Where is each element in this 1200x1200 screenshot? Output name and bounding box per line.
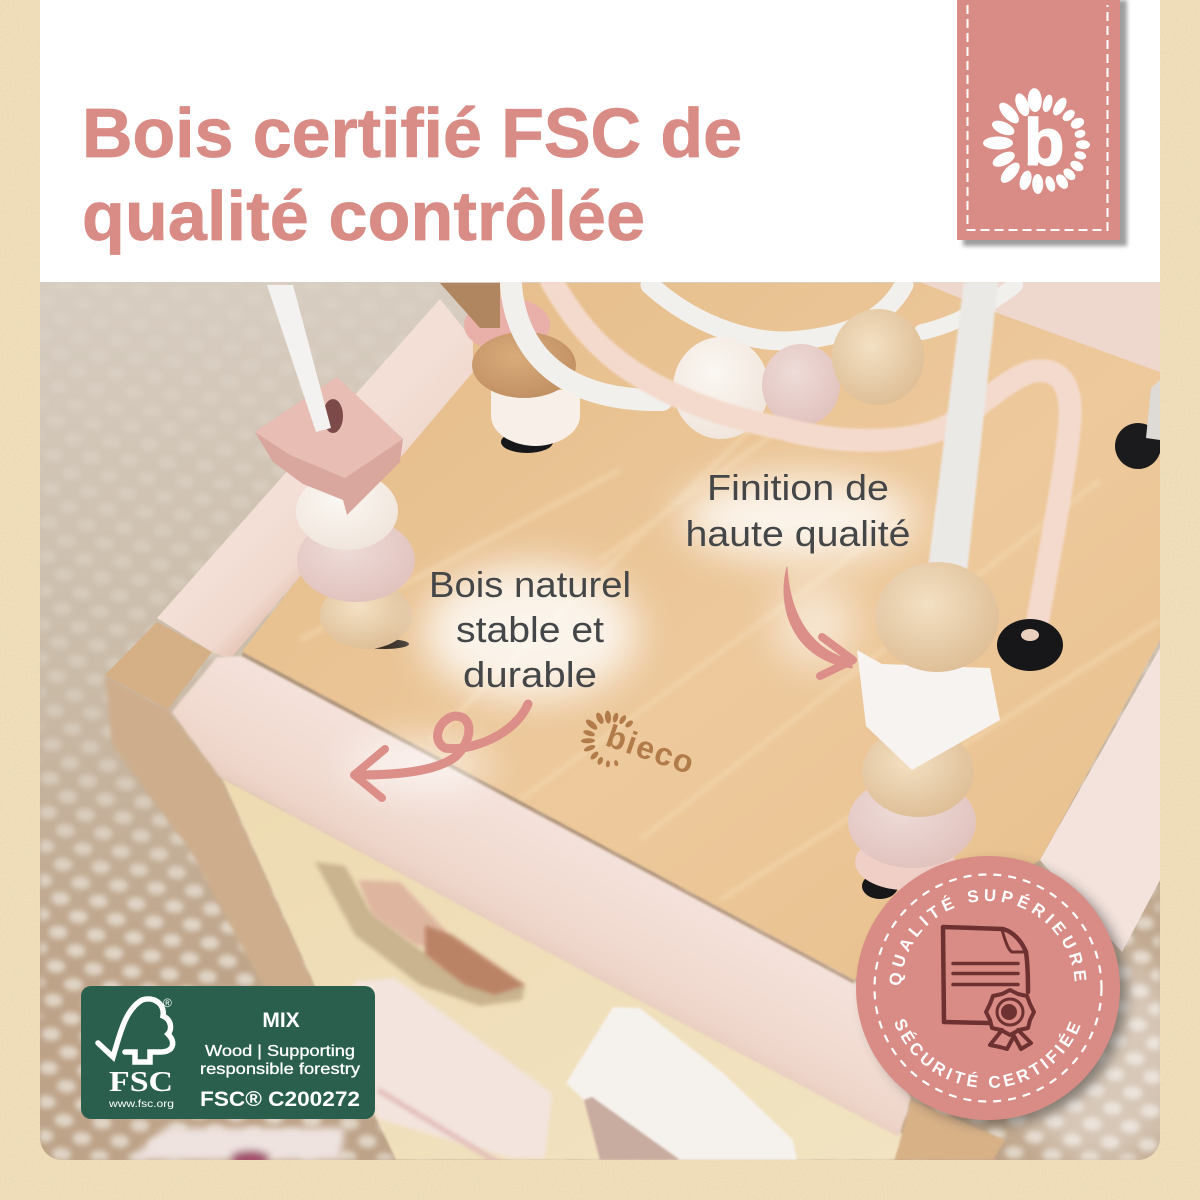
bieco flower logo (983, 88, 1090, 194)
label: high quality finish: Finition de (707, 467, 889, 508)
wooden left leg (104, 676, 316, 986)
front panel with shape cutout (222, 778, 905, 1170)
seal shadow (865, 863, 1127, 1125)
FSC tree and tick logo (98, 999, 173, 1062)
quality seal (856, 855, 1135, 1132)
left white post (267, 285, 331, 432)
left bead stack (255, 285, 415, 649)
registered mark: ® (163, 996, 172, 1010)
FSC claim text (200, 1009, 360, 1111)
FSC claim text: MIX (262, 1009, 300, 1032)
icon: certificate (943, 927, 1034, 1049)
FSC label (81, 986, 375, 1119)
bieco flower logo: b (1024, 105, 1064, 179)
corner block (895, 1100, 1005, 1160)
label: high quality finish (686, 467, 910, 554)
wood grain (300, 400, 1160, 900)
front pink rail (172, 656, 911, 1137)
cutout rim (315, 862, 525, 1006)
FSC background (81, 986, 375, 1119)
seal top text: QUALITÉ SUPÉRIEURE (890, 889, 1086, 985)
white block (566, 1007, 797, 1160)
FSC wordmark: FSC (109, 1066, 173, 1098)
tag body (957, 0, 1120, 240)
right bead stack (848, 562, 1000, 899)
title: Bois certifié FSC de (82, 94, 742, 172)
board shadow line (242, 654, 854, 982)
pink blurred toy block (354, 978, 552, 1158)
pink block (255, 377, 403, 515)
tag shadow (963, 0, 1127, 246)
label: natural wood: durable (463, 654, 597, 695)
blurred flower toy bottom (130, 1128, 345, 1166)
icon: rosette (986, 990, 1034, 1049)
tag stitching (968, 5, 1108, 230)
text highlight glows (345, 476, 916, 791)
left corner post top (105, 622, 212, 709)
seal dashed ring (874, 874, 1102, 1102)
floor rug (40, 282, 1190, 1170)
label: high quality finish: haute qualité (686, 513, 910, 554)
white post (928, 282, 998, 570)
cutout inner light (358, 880, 452, 950)
FSC url: www.fsc.org (108, 1098, 174, 1110)
seal bottom text: SÉCURITÉ CERTIFIÉE (895, 1019, 1081, 1088)
back rails (157, 282, 1160, 952)
pink wire (552, 282, 1070, 630)
title: qualité contrôlée (82, 177, 645, 255)
arrow: curve to bead (784, 567, 853, 676)
black peg for pink wire (997, 619, 1063, 671)
title (82, 94, 742, 255)
seal disc (856, 856, 1120, 1120)
white header band (40, 0, 1160, 282)
FSC claim text: responsible forestry (200, 1061, 360, 1078)
product photo (40, 282, 1190, 1170)
label: natural wood (429, 564, 631, 695)
bieco engraved logo: bieco (602, 718, 699, 781)
wooden top board (242, 283, 1160, 980)
label: natural wood: stable et (456, 609, 604, 650)
cutout inner dark (425, 925, 525, 995)
bookmark tag (957, 0, 1127, 246)
FSC claim text: FSC® C200272 (200, 1088, 360, 1111)
white block slot (584, 1097, 680, 1160)
back bead stack (440, 283, 580, 453)
white wire loops (511, 285, 1015, 400)
label: natural wood: Bois naturel (429, 564, 631, 605)
arrow: loop to rail (354, 704, 528, 798)
pink streak (376, 1088, 498, 1160)
wire beads (673, 309, 924, 439)
FSC claim text: Wood | Supporting (205, 1043, 355, 1060)
far right black peg (1115, 380, 1161, 469)
